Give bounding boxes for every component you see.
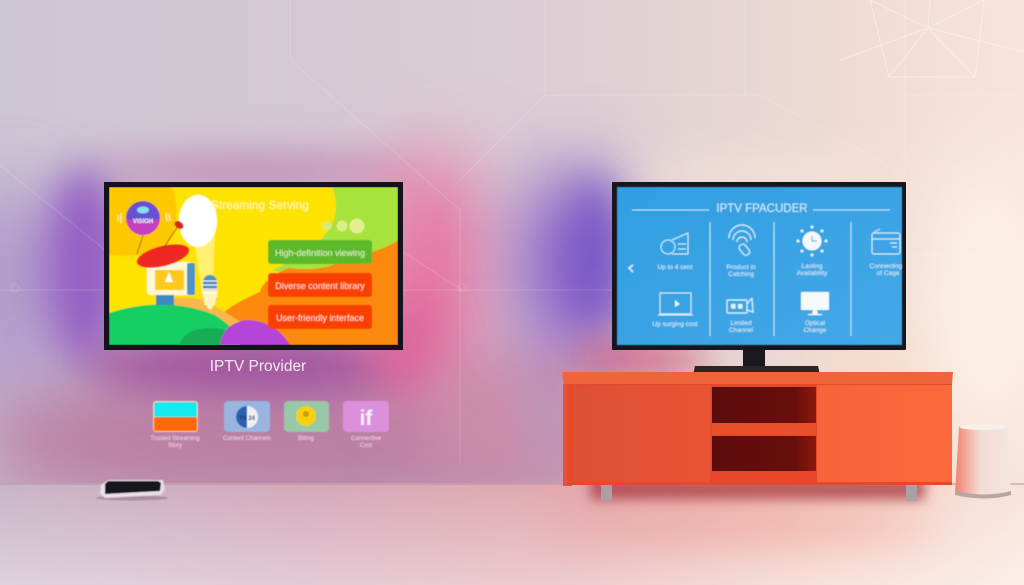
white cylinder stool: [955, 424, 1011, 498]
mascot stem and mic: [194, 204, 217, 306]
icon card: green: [284, 401, 329, 442]
right door: [817, 385, 952, 482]
TV console cabinet: [562, 372, 953, 501]
feature button library: Diverse content library: [275, 281, 365, 291]
TV bezel: [612, 182, 906, 350]
feature button library: [268, 273, 372, 297]
carousel arrow: [629, 265, 633, 272]
TV bezel: [104, 182, 403, 350]
left door: [573, 385, 710, 482]
right TV: [612, 182, 906, 375]
feature cell 5: [652, 293, 698, 328]
icon card: split colour: Story: [168, 443, 182, 449]
icon card: green: Billing: [298, 436, 314, 442]
circuit line pattern: [0, 0, 1024, 465]
screen heading: IPTV FPACUDER: [716, 203, 808, 215]
left TV: [104, 182, 403, 362]
balloon: [126, 201, 160, 235]
feature button green: High-definition viewing: [275, 248, 365, 258]
icon card: blue: TV 24: [239, 416, 256, 422]
open shelves: [712, 387, 816, 481]
feature cell 4: Connecting: [870, 263, 903, 270]
feature cell 3: Availability: [797, 270, 828, 277]
streaming screen: VISIOH: [133, 219, 153, 225]
feature button green: [268, 240, 372, 264]
heading: Streaming Serving: [211, 200, 309, 212]
feature cell 2: Catching: [728, 271, 754, 278]
feature cell 6: [727, 298, 754, 334]
feature button interface: User-friendly interface: [276, 313, 364, 323]
feature cell 7: Optical: [805, 320, 826, 327]
dots: [322, 222, 332, 230]
feature cell 3: Lasting: [802, 263, 823, 270]
icon card: blue: [223, 401, 271, 442]
TV stand: [693, 348, 820, 375]
cabinet floor shadow: [590, 478, 925, 500]
feature cell 3: [796, 226, 828, 277]
feature cell 1: Up to 4 cent: [657, 264, 693, 271]
icon card: pink: [343, 401, 389, 449]
feature cell 2: [726, 225, 756, 278]
set-top box: [96, 480, 168, 500]
feature cell 4: of Cage: [877, 270, 900, 277]
icon row: [150, 401, 389, 449]
cabinet legs: [601, 485, 917, 501]
feature button interface: [268, 305, 372, 329]
icon card: split colour: Trusted Streaming: [150, 436, 200, 442]
feature cell 7: Change: [804, 327, 827, 334]
feature cell 1: [657, 233, 693, 271]
feature cell 2: Product in: [726, 264, 756, 271]
icon card: blue: Content Channels: [223, 436, 271, 442]
feature cell 7: [801, 292, 829, 334]
icon card: split colour: [150, 401, 200, 449]
feature cell 4: [870, 229, 903, 277]
floor: [0, 478, 1024, 585]
title: IPTV Provider: IPTV Provider: [210, 358, 306, 375]
robot: [156, 295, 174, 305]
decorative wireframe polygon: [840, 0, 1024, 77]
streaming screen: [109, 187, 398, 362]
icon card: pink: Connective: [351, 436, 382, 442]
icon card: pink: Cost: [360, 443, 372, 449]
feature cell 6: Channel: [729, 327, 754, 334]
icon card: pink: if: [360, 407, 373, 430]
feature cell 5: Up surging cost: [652, 321, 698, 328]
provider screen: [617, 187, 903, 345]
feature cell 6: Limited: [731, 320, 752, 327]
